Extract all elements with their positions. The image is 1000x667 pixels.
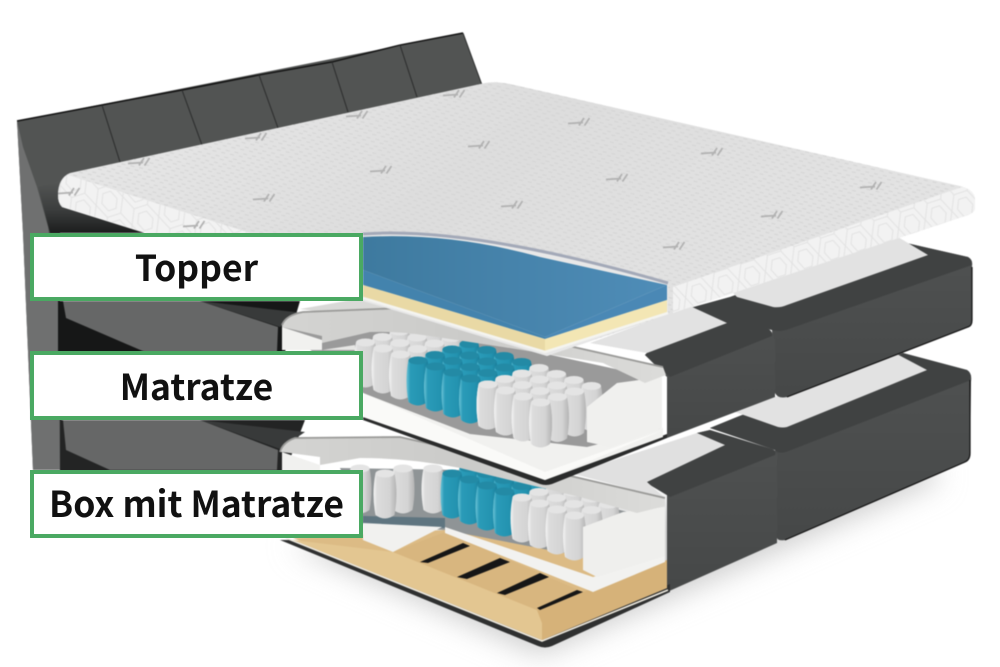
lower mattress cut (280, 437, 665, 592)
topper (58, 82, 975, 356)
upper right box (690, 234, 972, 398)
upper foam bottom (363, 393, 667, 485)
topper side bands (58, 175, 975, 313)
topper cut: cream foam (363, 285, 668, 352)
slats (420, 543, 583, 610)
lower right box (710, 352, 971, 540)
upper middle box (590, 306, 775, 438)
lower foam top (280, 437, 665, 513)
upper foam top (282, 308, 666, 383)
headboard (17, 33, 482, 470)
wood base frame (280, 530, 670, 648)
lower foam block (583, 507, 665, 577)
label: Matratze: Matratze (120, 360, 273, 411)
topper logo marks (58, 90, 882, 250)
topper cut: blue foam (363, 233, 668, 356)
label: Box mit Matratze: Box mit Matratze (49, 477, 344, 528)
upper mattress cut (282, 308, 667, 485)
label: Box mit Matratze (30, 470, 363, 538)
springs left lower (348, 464, 444, 518)
upper front row redraw (476, 380, 552, 448)
label: Matratze (30, 351, 363, 420)
lower middle box (553, 430, 777, 592)
topper surface (58, 82, 975, 356)
floor shadow (290, 460, 940, 655)
label: Topper: Topper (135, 241, 258, 292)
left box layer one (58, 298, 520, 352)
left box layer two (60, 420, 305, 472)
springs upper grid (354, 322, 603, 448)
label: Topper (30, 233, 363, 301)
lower foam bottom (363, 523, 665, 592)
upper foam block (587, 377, 662, 447)
springs lower grid (440, 458, 620, 560)
